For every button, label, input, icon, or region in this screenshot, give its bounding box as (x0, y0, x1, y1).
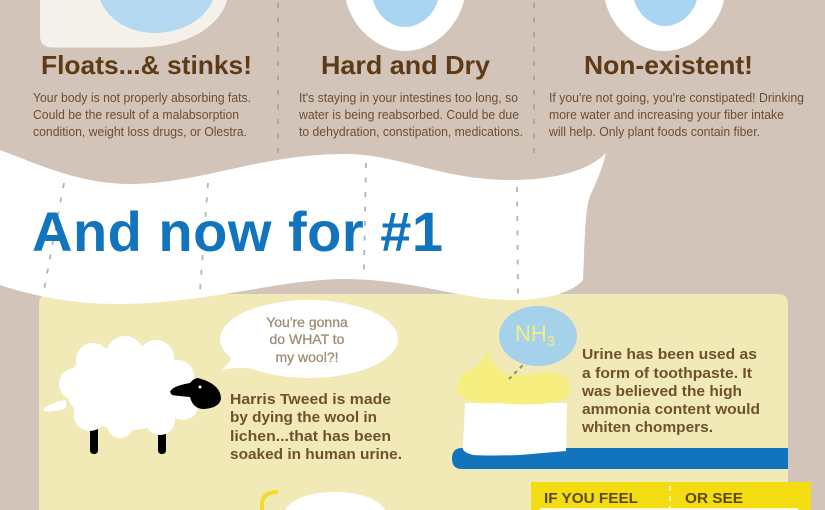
callout: NH3 bubble: 3 (547, 333, 555, 350)
text: harris tweed: Harris Tweed is made (230, 391, 391, 408)
heading: and now for #1: And now for #1 (32, 200, 443, 263)
text: hard and dry explanation (298, 90, 523, 139)
table: symptoms header: IF YOU FEEL (544, 491, 638, 507)
banner: toilet paper ribbon (0, 150, 606, 304)
text: non-existent explanation: will help. Only plant foods contain fiber. (548, 124, 760, 139)
callout: sheep speech bubble: You're gonna (266, 314, 348, 330)
text: urine toothpaste: ammonia content would (582, 401, 760, 418)
text: non-existent explanation: If you're not going, you're constipated! Drinking (549, 90, 804, 105)
icon: empty bowl (605, 0, 724, 51)
heading: non-existent: Non-existent! (584, 50, 753, 80)
text: urine toothpaste: a form of toothpaste. It (582, 365, 752, 382)
callout: NH3 bubble (499, 306, 577, 366)
icon: sheep (44, 336, 221, 454)
text: harris tweed: by dying the wool in (230, 409, 377, 426)
callout: sheep speech bubble: do WHAT to (270, 331, 345, 347)
text: floats explanation: Your body is not properly absorbing fats. (33, 90, 251, 105)
text: hard and dry explanation: to dehydration, constipation, medications. (299, 124, 523, 139)
icon: hard stool bowl (346, 0, 464, 51)
icon: toothbrush with urine toothpaste (452, 306, 788, 469)
text: non-existent explanation: more water and increasing your fiber intake (549, 107, 784, 122)
text: urine toothpaste (581, 346, 760, 436)
icon: floating stool bowl (40, 0, 227, 48)
text: floats explanation: Could be the result of a malabsorption (33, 107, 239, 122)
column: non-existent (548, 50, 804, 139)
table: symptoms header: OR SEE (685, 491, 743, 507)
icon: yellow bracket and white shape (262, 492, 385, 510)
callout: sheep speech bubble (220, 300, 398, 378)
panel: urine facts (39, 294, 788, 510)
callout: sheep speech bubble: my wool?! (275, 349, 339, 365)
text: hard and dry explanation: water is being reabsorbed. Could be due (298, 107, 519, 122)
text: harris tweed: soaked in human urine. (230, 446, 402, 463)
column: hard and dry (298, 50, 523, 139)
text: urine toothpaste: whiten chompers. (581, 419, 713, 436)
text: floats explanation: condition, weight loss drugs, or Olestra. (33, 124, 247, 139)
text: floats explanation (33, 90, 251, 139)
text: non-existent explanation (548, 90, 804, 139)
text: harris tweed (230, 391, 402, 463)
text: urine toothpaste: Urine has been used as (582, 346, 757, 363)
column: floats (33, 50, 252, 139)
callout: NH3 bubble: NH (515, 321, 547, 346)
table: symptoms header (531, 482, 811, 510)
text: hard and dry explanation: It's staying in your intestines too long, so (299, 90, 518, 105)
text: urine toothpaste: was believed the high (581, 383, 742, 400)
heading: hard and dry: Hard and Dry (321, 50, 491, 80)
text: harris tweed: lichen...that has been (230, 428, 391, 445)
heading: floats: Floats...& stinks! (41, 50, 252, 80)
